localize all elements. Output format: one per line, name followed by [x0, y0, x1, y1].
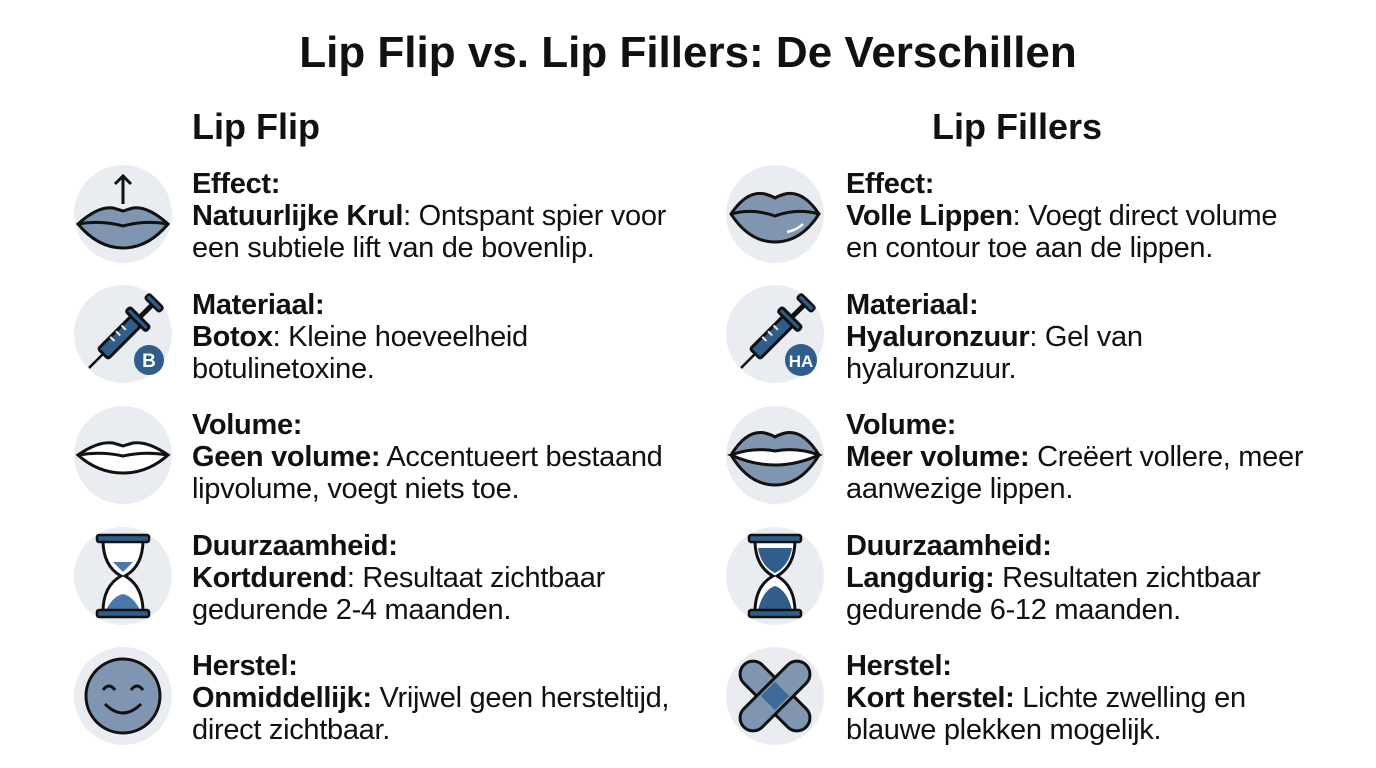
text: fillers volume	[846, 409, 1304, 505]
text: lip flip volume	[192, 409, 662, 505]
text: lip flip material: Materiaal:	[192, 289, 324, 321]
text: fillers recovery: Kort herstel: Lichte zwelling en blauwe plekken mogelijk.	[846, 682, 1246, 746]
text: lip flip effect	[192, 168, 666, 264]
text: lip flip effect: Effect:	[192, 168, 280, 200]
text: fillers recovery	[846, 650, 1246, 746]
text: lip flip duration: Kortdurend: Resultaat zichtbaar gedurende 2-4 maanden.	[192, 562, 605, 626]
icon: full lips	[726, 165, 824, 263]
text: fillers recovery: Herstel:	[846, 650, 952, 682]
icon: syringe B	[74, 285, 172, 383]
text: fillers volume: Volume:	[846, 409, 956, 441]
icon: hourglass full	[726, 527, 824, 625]
icon: syringe HA	[726, 285, 824, 383]
icon: bandage cross	[726, 647, 824, 745]
text: lip flip recovery: Onmiddellijk: Vrijwel geen hersteltijd, direct zichtbaar.	[192, 682, 669, 746]
text: fillers duration: Duurzaamheid:	[846, 530, 1052, 562]
text: fillers material: Materiaal:	[846, 289, 978, 321]
text: fillers effect: Volle Lippen: Voegt direct volume en contour toe aan de lippen.	[846, 200, 1277, 264]
heading: Lip Fillers: Lip Fillers	[932, 106, 1102, 147]
text: lip flip material	[192, 289, 528, 385]
title: Lip Flip vs. Lip Fillers: De Verschillen	[299, 28, 1077, 77]
text: fillers volume: Meer volume: Creëert vollere, meer aanwezige lippen.	[846, 441, 1303, 505]
text: lip flip recovery	[192, 650, 669, 746]
text: fillers material: Hyaluronzuur: Gel van hyaluronzuur.	[846, 321, 1143, 385]
text: lip flip volume: Volume:	[192, 409, 302, 441]
text: lip flip material: Botox: Kleine hoeveelheid botulinetoxine.	[192, 321, 528, 385]
icon: smiley	[74, 647, 172, 745]
icon: thin lips	[74, 406, 172, 504]
icon: open full lips	[726, 406, 824, 504]
text: lip flip volume: Geen volume: Accentueert bestaand lipvolume, voegt niets toe.	[192, 441, 662, 505]
text: lip flip duration	[192, 530, 605, 626]
text: fillers effect	[846, 168, 1277, 264]
text: fillers material	[846, 289, 1143, 385]
text: lip flip duration: Duurzaamheid:	[192, 530, 398, 562]
text: lip flip recovery: Herstel:	[192, 650, 298, 682]
text: fillers duration	[846, 530, 1261, 626]
text: fillers duration: Langdurig: Resultaten zichtbaar gedurende 6-12 maanden.	[846, 562, 1261, 626]
icon: syringe HA: HA	[789, 352, 813, 371]
icon: syringe B: B	[142, 351, 156, 372]
icon: lips with up arrow	[74, 165, 172, 263]
icon: hourglass small	[74, 527, 172, 625]
text: fillers effect: Effect:	[846, 168, 934, 200]
text: lip flip effect: Natuurlijke Krul: Ontspant spier voor een subtiele lift van de bovenlip.	[192, 200, 666, 264]
heading: Lip Flip: Lip Flip	[192, 106, 320, 147]
